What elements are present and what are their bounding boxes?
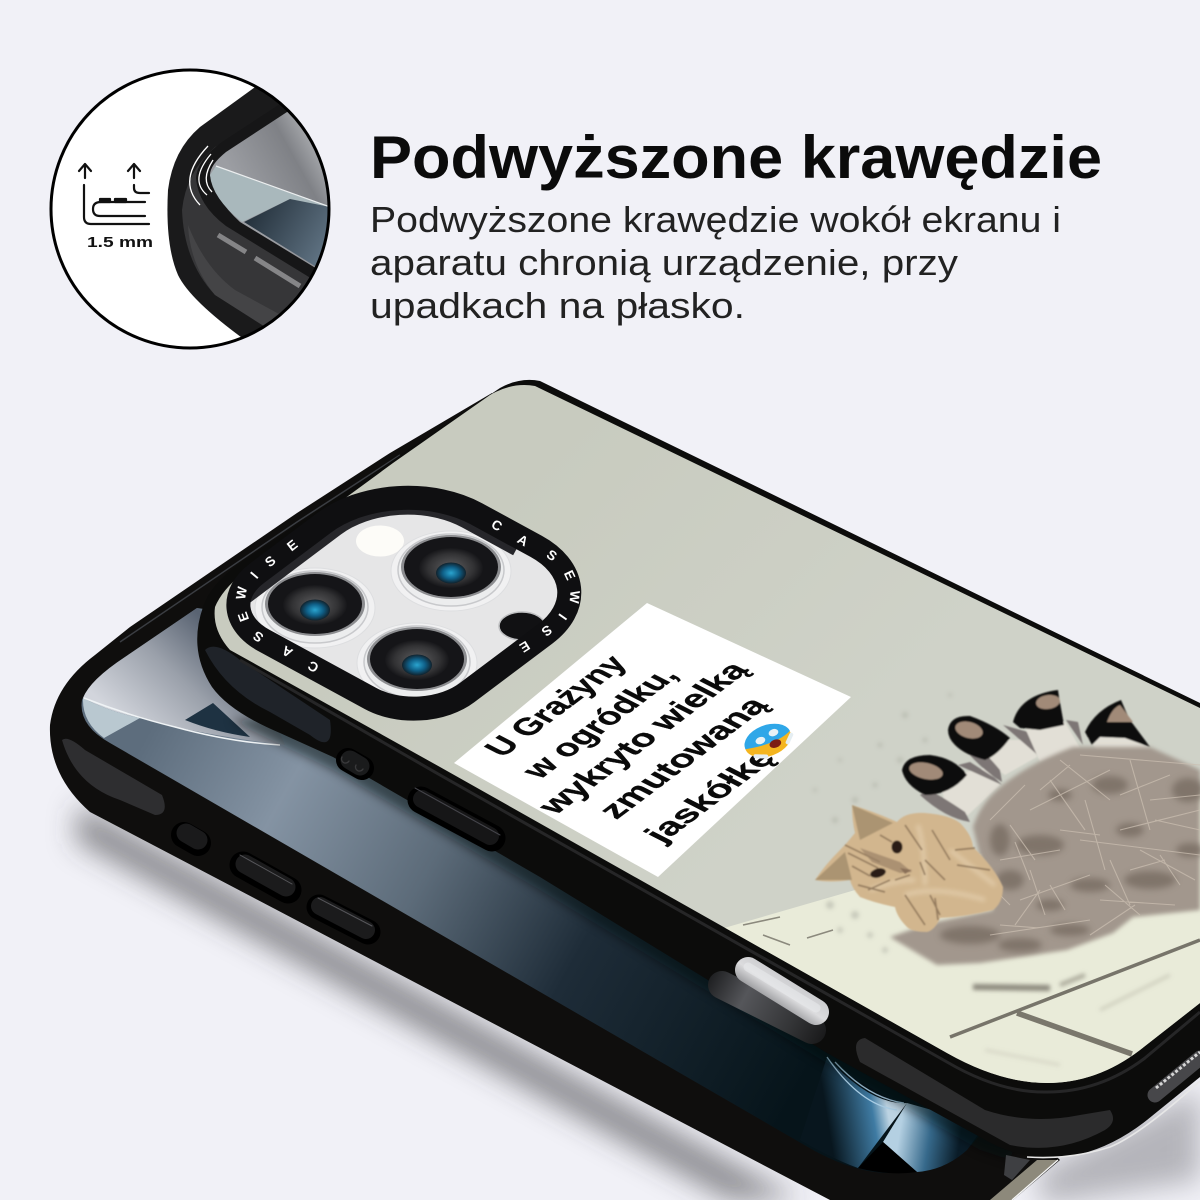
kitten nose <box>900 868 912 874</box>
sticker: caption <box>477 651 784 848</box>
ring lettering: S <box>539 622 555 639</box>
lower phone: translucent side grip <box>62 739 165 815</box>
kitten fur markings <box>845 825 990 925</box>
flash <box>356 526 404 556</box>
ring lettering: W <box>233 585 250 601</box>
back: blurred floor shadows <box>973 975 1170 1065</box>
screen: blue light beams <box>822 1058 907 1168</box>
upper lens <box>391 531 511 611</box>
screen: grey upper wallpaper <box>83 608 285 745</box>
circle base <box>51 70 329 348</box>
camera ring <box>208 470 609 726</box>
ring lettering: I <box>247 569 261 582</box>
description text: aparatu chronią urządzenie, przy <box>370 242 958 283</box>
top phone: translucent bottom grip <box>856 1038 1113 1148</box>
illustration: kitten <box>815 805 1003 932</box>
title: Podwyższone krawędzie <box>370 124 1102 191</box>
kitten eyes <box>892 840 902 854</box>
description text: Podwyższone krawędzie wokół ekranu i <box>370 199 1061 240</box>
top phone: printed back <box>215 385 1200 1100</box>
camera plate <box>208 470 609 726</box>
top phone: case body <box>197 380 1200 1158</box>
nest twigs <box>990 755 1200 935</box>
lower phone: case bumper <box>50 393 1060 1200</box>
swallow 4 <box>1085 700 1150 755</box>
nest shadow patches <box>940 776 1200 952</box>
callout: raised edge close-up <box>51 70 350 348</box>
top phone: side buttons <box>341 757 500 838</box>
ring lettering: S <box>544 547 560 564</box>
top phone: rim line <box>240 660 1200 1092</box>
lidar dot <box>499 612 545 640</box>
screen: dark navy shape <box>185 703 250 737</box>
illustration: swallows <box>902 690 1150 822</box>
icon: screaming face emoji <box>744 724 794 758</box>
top phone: translucent left grip <box>205 647 331 742</box>
kitten body <box>815 805 1003 932</box>
ring lettering: C <box>305 658 321 675</box>
drop shadow <box>75 805 1200 1200</box>
lower lens <box>357 623 477 703</box>
top phone: bottom speaker <box>1155 1058 1200 1095</box>
top phone: white rim highlight <box>1027 1081 1200 1158</box>
kitten ears <box>815 805 893 880</box>
ring lettering: I <box>555 611 570 623</box>
lower phone: screen <box>82 608 1010 1173</box>
sticker: white text card <box>454 603 851 877</box>
ring lettering: E <box>235 610 252 624</box>
back: wall background <box>215 385 1200 1083</box>
diagram label: 1.5 mm <box>87 234 153 251</box>
screen: pale wedge <box>83 698 140 738</box>
ring lettering: W <box>566 590 583 604</box>
ring lettering: S <box>262 553 279 570</box>
swallow 3 <box>1013 690 1083 762</box>
illustration: nest <box>890 747 1200 965</box>
highlight: bumper bar <box>218 235 300 286</box>
kitten muzzle shade <box>860 848 912 873</box>
main lens <box>255 568 375 648</box>
sticker: caption: wykryto wielką <box>529 657 757 820</box>
phone corner close-up <box>167 88 328 337</box>
nest body <box>890 747 1200 965</box>
sticker: caption: U Grażyny <box>477 651 636 762</box>
lower phone: bottom translucent corner <box>990 1155 1058 1200</box>
swallow 1 <box>902 755 1002 822</box>
curved impact lines <box>190 146 213 205</box>
camera ring bevel <box>241 486 516 668</box>
ring lettering: E <box>561 568 578 582</box>
top phone: silver side button <box>722 967 816 1030</box>
circle outline <box>51 70 329 348</box>
product image: stacked phone cases <box>50 380 1200 1200</box>
screen: wallpaper highlight curve <box>84 698 280 745</box>
lower phone: bumper highlight <box>120 455 400 642</box>
ring lettering: E <box>284 537 300 554</box>
icon: raised edge diagram <box>79 164 149 224</box>
ring lettering: A <box>279 643 295 660</box>
kitten light fur <box>870 825 995 900</box>
lower phone: side buttons <box>184 833 372 932</box>
description text <box>370 199 1061 326</box>
description text: upadkach na płasko. <box>370 285 745 326</box>
ring lettering: A <box>515 532 531 549</box>
back: floor <box>724 800 1200 1083</box>
sticker: caption: zmutowaną <box>591 692 776 824</box>
camera island <box>208 470 609 726</box>
shadow of top phone on screen <box>231 714 978 1146</box>
back: blurred wall dots <box>825 712 927 954</box>
ring lettering: C <box>489 517 505 534</box>
ring lettering <box>233 517 583 675</box>
sticker: caption: jaskółkę <box>636 745 784 848</box>
swallow 2 <box>948 716 1040 782</box>
ring lettering: S <box>250 628 266 645</box>
ring lettering: E <box>517 638 533 655</box>
sticker: caption: w ogródku, <box>514 663 686 784</box>
